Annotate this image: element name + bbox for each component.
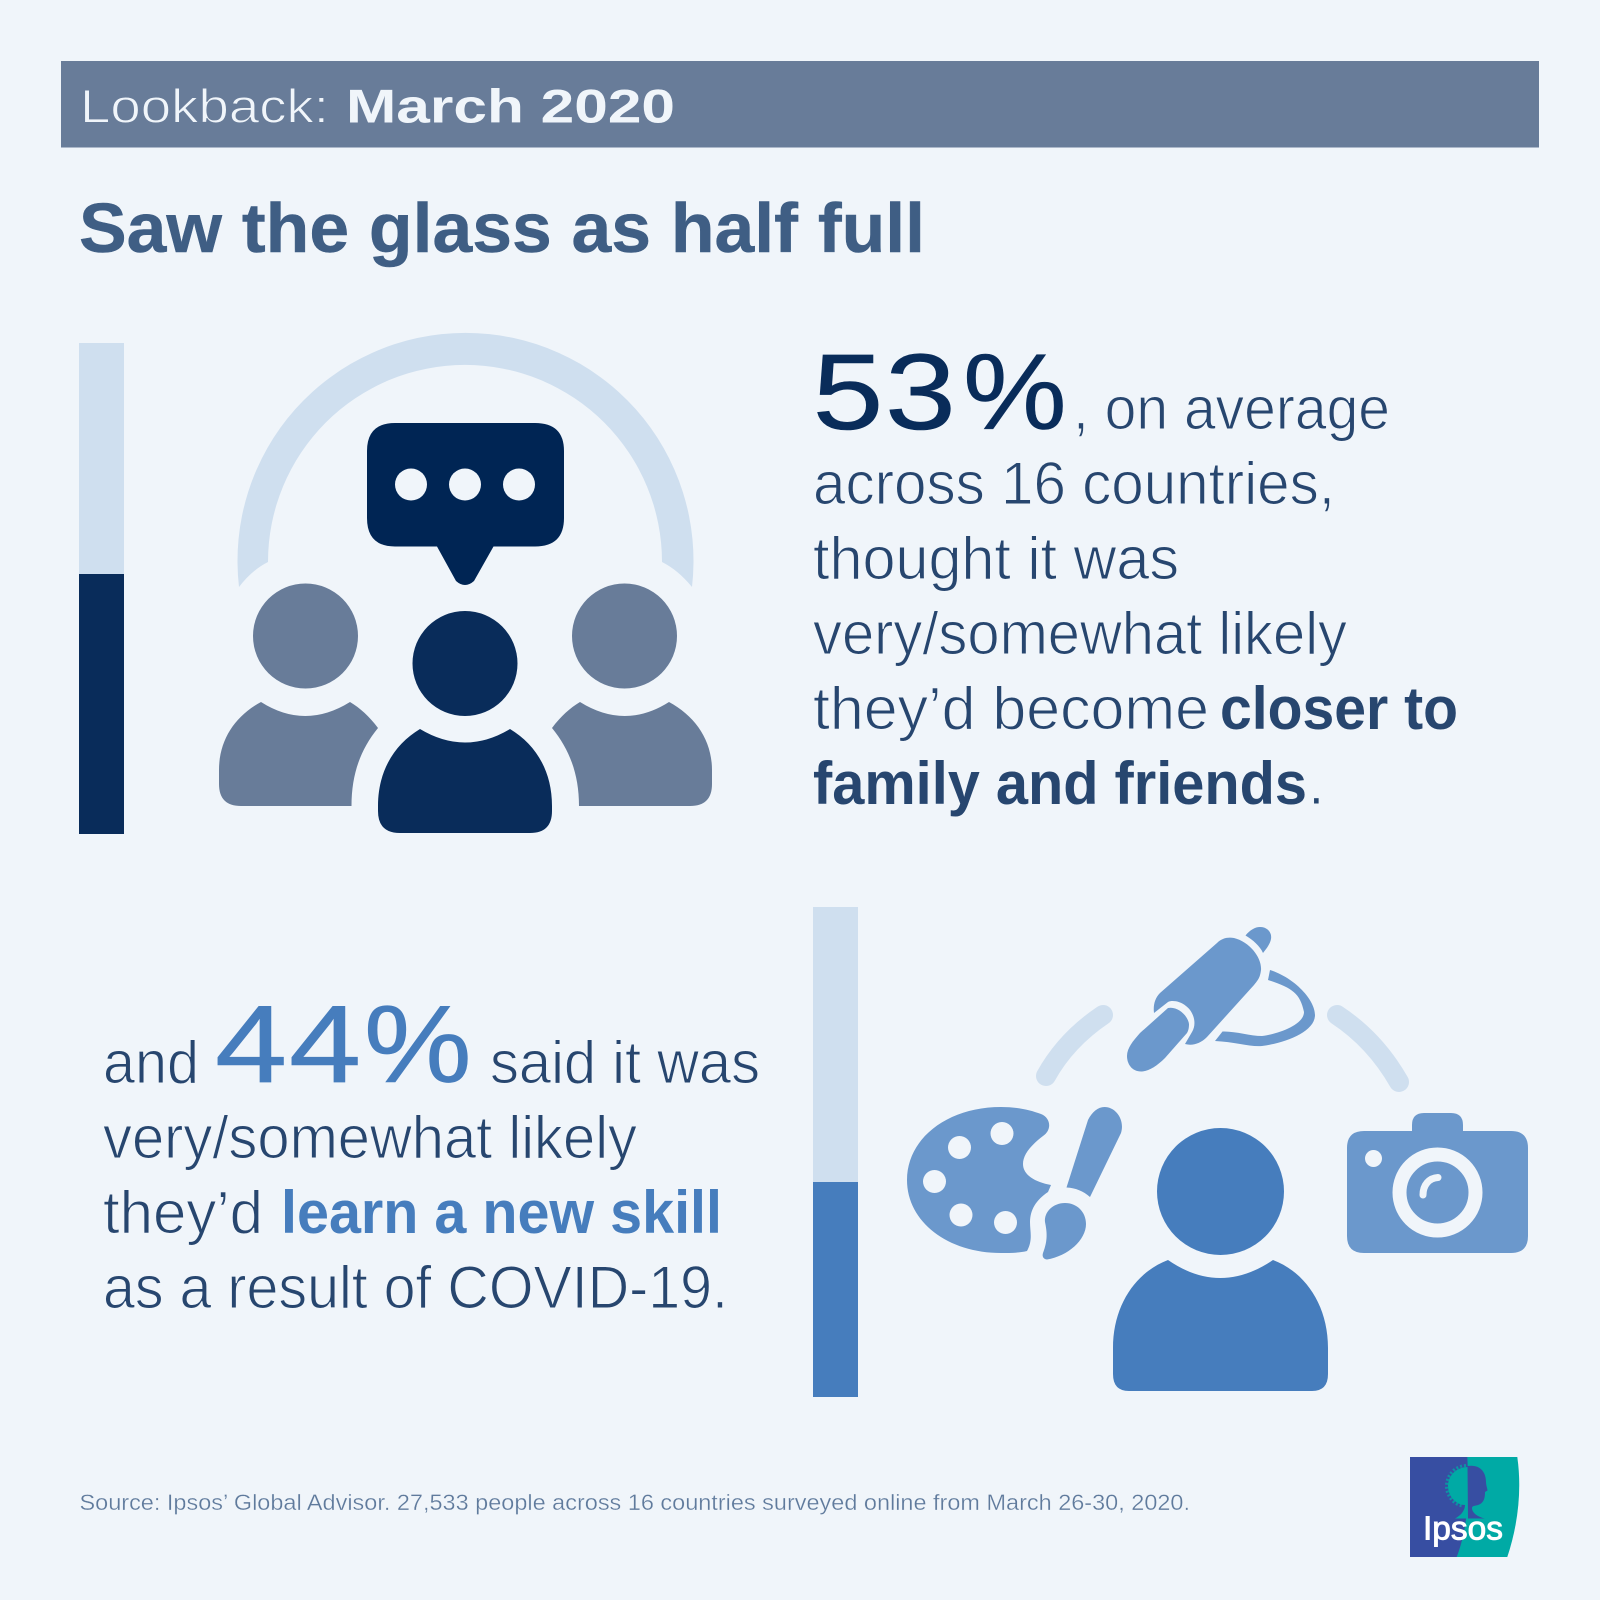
statistic text: 53% bbox=[812, 331, 1458, 817]
speech bubble bbox=[367, 423, 564, 585]
statistic text: 44%: as a result of COVID-19. bbox=[103, 1254, 728, 1321]
statistic text: 44%: said it was bbox=[490, 1029, 760, 1096]
statistic text: 44%: they’d bbox=[103, 1179, 263, 1246]
statistic text: 44% bbox=[103, 982, 760, 1321]
logo: Ipsos bbox=[1410, 1457, 1519, 1557]
bar: 53% gauge bbox=[79, 343, 124, 834]
statistic text: 44%: learn a new skill bbox=[281, 1179, 722, 1246]
logo: Ipsos: Ipsos bbox=[1423, 1510, 1503, 1546]
centre person bbox=[378, 611, 552, 833]
rolling pin bbox=[1127, 927, 1315, 1072]
statistic text: 44%: % bbox=[364, 982, 472, 1106]
header banner: March 2020 bbox=[346, 80, 675, 132]
statistic text: 44%: 44 bbox=[215, 983, 361, 1106]
statistic text: 53%: thought it was bbox=[813, 525, 1179, 592]
paint palette bbox=[907, 1107, 1051, 1253]
statistic text: 53%: % bbox=[963, 331, 1067, 452]
statistic text: 44%: and bbox=[103, 1029, 199, 1096]
statistic text: 44%: very/somewhat likely bbox=[103, 1104, 637, 1171]
source note: Source: Ipsos’ Global Advisor. 27,533 people across 16 countries surveyed online from March 26-30, 2020. bbox=[80, 1490, 1190, 1515]
statistic text: 53%: family and friends bbox=[813, 750, 1307, 817]
dashed arcs bbox=[1046, 1015, 1399, 1082]
paint brush bbox=[1043, 1107, 1122, 1260]
right person bbox=[552, 584, 712, 806]
statistic text: 53%: , on average bbox=[1073, 375, 1390, 442]
icon: person with hobbies bbox=[907, 927, 1528, 1391]
icon: people talking under an arc bbox=[219, 333, 712, 833]
statistic text: 53%: across 16 countries, bbox=[813, 450, 1335, 517]
bar: 44% gauge bbox=[813, 907, 858, 1397]
left person bbox=[219, 584, 378, 806]
camera bbox=[1347, 1113, 1528, 1253]
title: Saw the glass as half full bbox=[79, 189, 925, 267]
arc over group bbox=[238, 333, 693, 587]
statistic text: 53%: closer to bbox=[1220, 675, 1458, 742]
person bbox=[1113, 1128, 1328, 1391]
header banner bbox=[61, 61, 1539, 148]
statistic text: 53%: they’d become bbox=[813, 675, 1209, 742]
statistic text: 53%: 53 bbox=[812, 332, 956, 453]
header banner: Lookback: bbox=[80, 80, 329, 132]
statistic text: 53%: . bbox=[1308, 750, 1325, 817]
tree bbox=[1448, 1467, 1468, 1518]
profile bbox=[1468, 1466, 1488, 1518]
statistic text: 53%: very/somewhat likely bbox=[813, 600, 1347, 667]
